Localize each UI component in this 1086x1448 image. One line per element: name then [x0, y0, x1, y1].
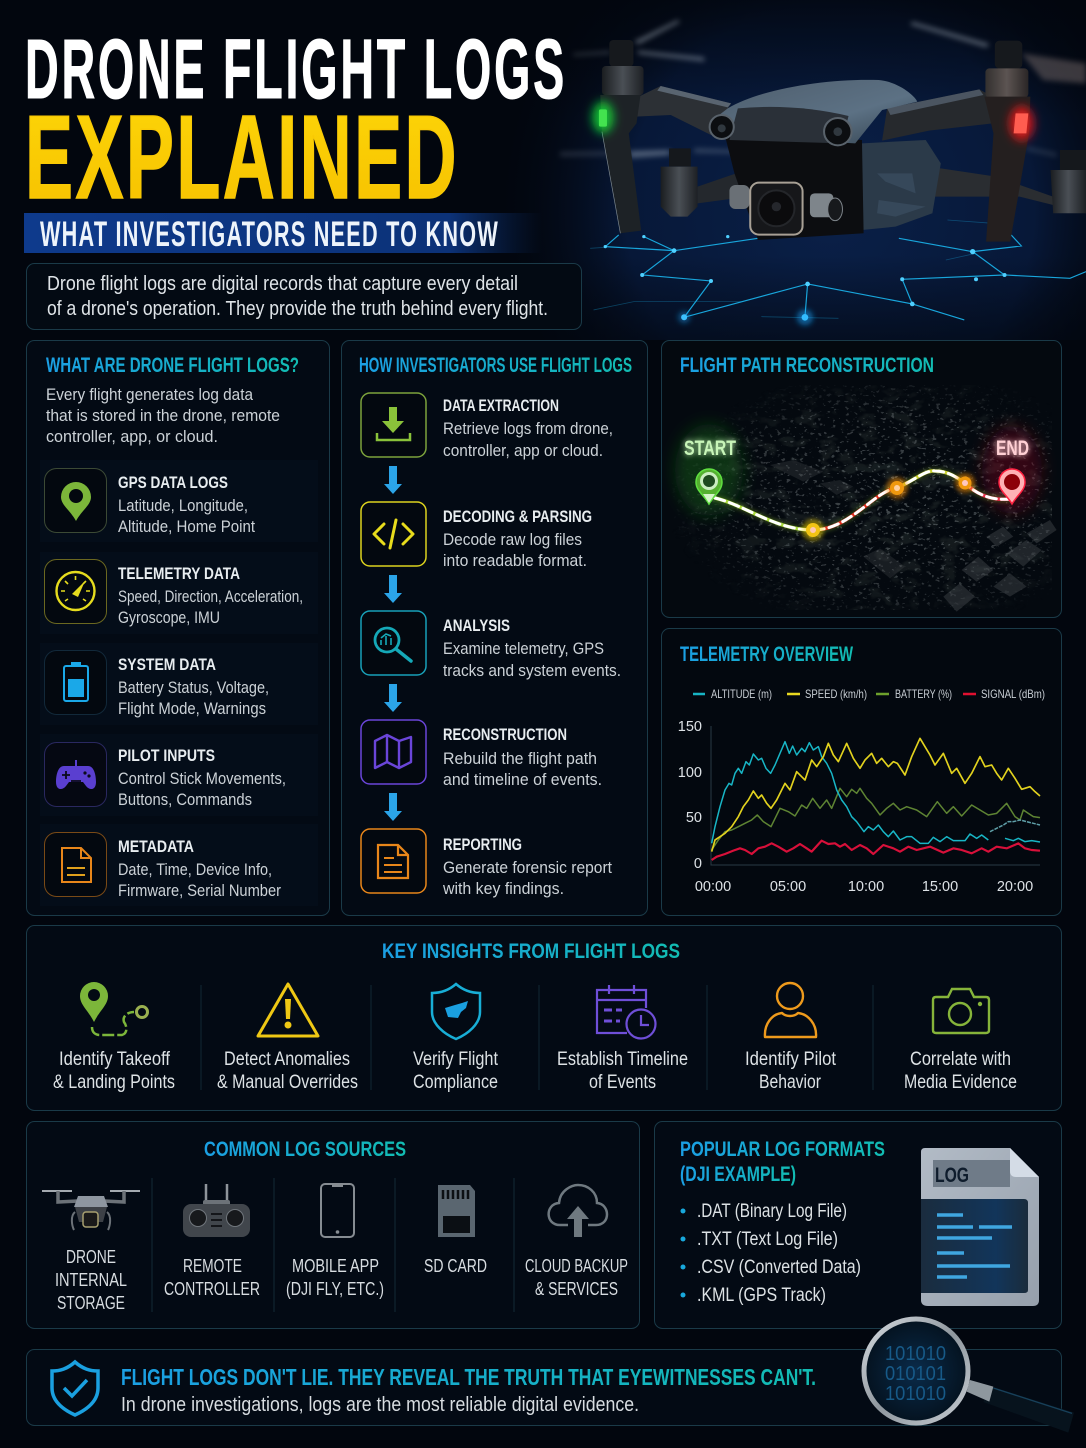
- insight: pilot behavior: Behavior: [759, 1072, 822, 1093]
- intro text: that is stored in the drone, remote: [46, 406, 280, 425]
- insight: anomalies: & Manual Overrides: [217, 1072, 358, 1093]
- magnifying glass: 101010: [885, 1383, 946, 1405]
- legend: ALTITUDE (m): [711, 687, 772, 701]
- insight: anomalies: Detect Anomalies: [224, 1049, 350, 1070]
- log file icon: [921, 1148, 1039, 1306]
- legend: [693, 687, 1045, 701]
- headline: FLIGHT LOGS DON'T LIE. THEY REVEAL THE TRUTH THAT EYEWITNESSES CAN'T.: [121, 1364, 816, 1390]
- item: telemetry data: Gyroscope, IMU: [118, 608, 220, 627]
- y axis labels: 50: [686, 810, 702, 826]
- x axis labels: 20:00: [997, 879, 1033, 895]
- legend: SPEED (km/h): [805, 687, 867, 701]
- insight: anomalies: [217, 984, 358, 1093]
- format list: [680, 1201, 861, 1306]
- log file icon: LOG: [935, 1164, 969, 1187]
- legend: BATTERY (%): [895, 687, 952, 701]
- step: reconstruction: Rebuild the flight path: [443, 749, 597, 768]
- magnifying glass: 101010: [885, 1343, 946, 1365]
- front left motor and leg: [600, 40, 731, 233]
- intro text: controller, app, or cloud.: [46, 427, 218, 446]
- item: pilot inputs: PILOT INPUTS: [118, 746, 215, 765]
- item: metadata: METADATA: [118, 837, 194, 856]
- source: drone internal storage: [42, 1191, 140, 1313]
- heading: FLIGHT PATH RECONSTRUCTION: [680, 354, 934, 377]
- item: system data: Flight Mode, Warnings: [118, 699, 266, 718]
- panel: callout banner: [26, 1350, 1062, 1426]
- propeller blur: [560, 20, 1086, 158]
- source: cloud backup: [525, 1185, 628, 1299]
- format list: .TXT (Text Log File): [697, 1229, 838, 1250]
- source: SD card: SD CARD: [424, 1256, 487, 1276]
- panel: what are drone flight logs: [26, 340, 330, 916]
- city map background: [672, 385, 1057, 612]
- flight path: [715, 471, 1010, 530]
- drone body: [710, 80, 941, 240]
- format list: .DAT (Binary Log File): [697, 1201, 847, 1222]
- arrow: [384, 575, 402, 603]
- step: reporting: REPORTING: [443, 835, 522, 854]
- item: metadata: Firmware, Serial Number: [118, 881, 281, 900]
- intro box: Drone flight logs are digital records that capture every detail: [47, 273, 518, 295]
- step: analysis: ANALYSIS: [443, 616, 510, 635]
- item: GPS data logs: Latitude, Longitude,: [118, 496, 248, 515]
- step: data extraction: Retrieve logs from drone,: [443, 419, 613, 438]
- panel: flight path reconstruction: [662, 340, 1062, 618]
- heading: COMMON LOG SOURCES: [204, 1138, 406, 1161]
- source: drone internal storage: INTERNAL: [55, 1270, 127, 1290]
- source: drone internal storage: STORAGE: [57, 1293, 125, 1313]
- item: telemetry data: TELEMETRY DATA: [118, 564, 240, 583]
- panel: how investigators use flight logs: [342, 340, 648, 916]
- insight: media evidence: Media Evidence: [904, 1072, 1017, 1093]
- subtitle banner: WHAT INVESTIGATORS NEED TO KNOW: [40, 215, 499, 254]
- insight: media evidence: Correlate with: [910, 1049, 1011, 1070]
- item: metadata: Date, Time, Device Info,: [118, 860, 272, 879]
- insight: compliance: [413, 984, 499, 1093]
- y axis labels: [678, 719, 702, 872]
- x axis labels: [695, 879, 1033, 895]
- circuit network under the drone: [590, 220, 1086, 325]
- end pin: END: [996, 437, 1029, 460]
- x axis labels: 05:00: [770, 879, 806, 895]
- arrow: [384, 793, 402, 821]
- item: system data: Battery Status, Voltage,: [118, 678, 269, 697]
- step: decoding and parsing: [361, 502, 592, 570]
- start pin: [684, 437, 736, 504]
- insight: timeline: of Events: [589, 1072, 656, 1093]
- step: reporting: Generate forensic report: [443, 858, 612, 877]
- end pin: [996, 437, 1029, 504]
- drone illustration: [560, 20, 1086, 325]
- subtext: In drone investigations, logs are the most reliable digital evidence.: [121, 1394, 639, 1416]
- green and red nav lights: [592, 101, 1034, 141]
- step: reporting: with key findings.: [442, 879, 564, 898]
- heading: KEY INSIGHTS FROM FLIGHT LOGS: [382, 940, 680, 963]
- x axis labels: 15:00: [922, 879, 958, 895]
- item: pilot inputs: Control Stick Movements,: [118, 769, 286, 788]
- intro text: [46, 385, 280, 446]
- item: pilot inputs: [40, 734, 318, 816]
- item: GPS data logs: Altitude, Home Point: [118, 517, 255, 536]
- insight: takeoff and landing: & Landing Points: [53, 1072, 175, 1093]
- step: data extraction: DATA EXTRACTION: [443, 396, 559, 415]
- step: decoding and parsing: into readable format.: [443, 551, 587, 570]
- insight: compliance: Compliance: [413, 1072, 498, 1093]
- y axis labels: 0: [694, 856, 702, 872]
- source: mobile app: MOBILE APP: [292, 1256, 379, 1276]
- source: remote controller: CONTROLLER: [164, 1279, 260, 1299]
- heading: (DJI EXAMPLE): [680, 1163, 796, 1186]
- insight: compliance: Verify Flight: [413, 1049, 499, 1070]
- step: data extraction: controller, app or cloud.: [443, 441, 603, 460]
- legend: SIGNAL (dBm): [981, 687, 1045, 701]
- insight: takeoff and landing: Identify Takeoff: [59, 1049, 171, 1070]
- intro box: [26, 264, 582, 330]
- heading: WHAT ARE DRONE FLIGHT LOGS?: [46, 354, 299, 377]
- step: reconstruction: and timeline of events.: [443, 770, 602, 789]
- step: analysis: Examine telemetry, GPS: [443, 639, 604, 658]
- heading: TELEMETRY OVERVIEW: [680, 643, 853, 666]
- line chart: [678, 719, 1040, 895]
- step: reconstruction: [361, 720, 602, 789]
- source: remote controller: REMOTE: [183, 1256, 242, 1276]
- y axis labels: 150: [678, 719, 702, 735]
- rear motors and arms: [661, 148, 1086, 217]
- item: system data: [40, 643, 318, 725]
- step: analysis: tracks and system events.: [443, 661, 621, 680]
- source: mobile app: [286, 1184, 384, 1299]
- step: analysis: [361, 611, 621, 680]
- item: GPS data logs: GPS DATA LOGS: [118, 473, 228, 492]
- front right motor and leg: [882, 41, 1030, 242]
- arrow: [384, 466, 402, 494]
- heading: [680, 1138, 885, 1186]
- step: decoding and parsing: DECODING & PARSING: [443, 507, 592, 526]
- intro box: of a drone's operation. They provide the truth behind every flight.: [47, 298, 548, 320]
- magnifying glass: 010101: [885, 1363, 946, 1385]
- icon: shield check: [52, 1362, 98, 1415]
- step: reconstruction: RECONSTRUCTION: [443, 725, 567, 744]
- insight: timeline: Establish Timeline: [557, 1049, 688, 1070]
- source: SD card: [424, 1185, 487, 1276]
- title: [25, 22, 567, 224]
- start pin: START: [684, 437, 736, 460]
- source: cloud backup: & SERVICES: [535, 1279, 618, 1299]
- arrow: [384, 684, 402, 712]
- panel: telemetry overview: [662, 628, 1062, 916]
- panel: common log sources: [26, 1122, 640, 1328]
- source: mobile app: (DJI FLY, ETC.): [286, 1279, 384, 1299]
- step: reporting: [361, 829, 612, 898]
- intro text: Every flight generates log data: [46, 385, 253, 404]
- source: cloud backup: CLOUD BACKUP: [525, 1256, 628, 1276]
- subtitle banner: [24, 213, 542, 254]
- step: data extraction: [361, 393, 613, 460]
- drone camera: [729, 183, 842, 235]
- waypoints: [802, 473, 975, 541]
- title: DRONE FLIGHT LOGS: [25, 22, 567, 116]
- heading: POPULAR LOG FORMATS: [680, 1138, 885, 1161]
- source: remote controller: [164, 1184, 260, 1299]
- item: metadata: [40, 824, 318, 906]
- format list: .CSV (Converted Data): [697, 1257, 861, 1278]
- y axis labels: 100: [678, 765, 702, 781]
- item: system data: SYSTEM DATA: [118, 655, 216, 674]
- step: decoding and parsing: Decode raw log files: [443, 530, 582, 549]
- insight: pilot behavior: [745, 983, 837, 1093]
- item: telemetry data: Speed, Direction, Acceleration,: [118, 587, 303, 606]
- heading: HOW INVESTIGATORS USE FLIGHT LOGS: [359, 354, 632, 377]
- source: drone internal storage: DRONE: [66, 1247, 116, 1267]
- panel: key insights: [26, 926, 1062, 1110]
- magnifying glass: [864, 1319, 1074, 1433]
- insight: timeline: [557, 985, 688, 1093]
- insight: takeoff and landing: [53, 982, 175, 1093]
- x axis labels: 00:00: [695, 879, 731, 895]
- panel: popular log formats: [654, 1122, 1062, 1328]
- data series: [712, 738, 1040, 860]
- insight: media evidence: [904, 989, 1017, 1093]
- insight: pilot behavior: Identify Pilot: [745, 1049, 837, 1070]
- format list: .KML (GPS Track): [697, 1285, 826, 1306]
- item: pilot inputs: Buttons, Commands: [118, 790, 252, 809]
- x axis labels: 10:00: [848, 879, 884, 895]
- item: telemetry data: [40, 552, 318, 634]
- item: GPS data logs: [40, 460, 318, 542]
- title: EXPLAINED: [25, 91, 459, 224]
